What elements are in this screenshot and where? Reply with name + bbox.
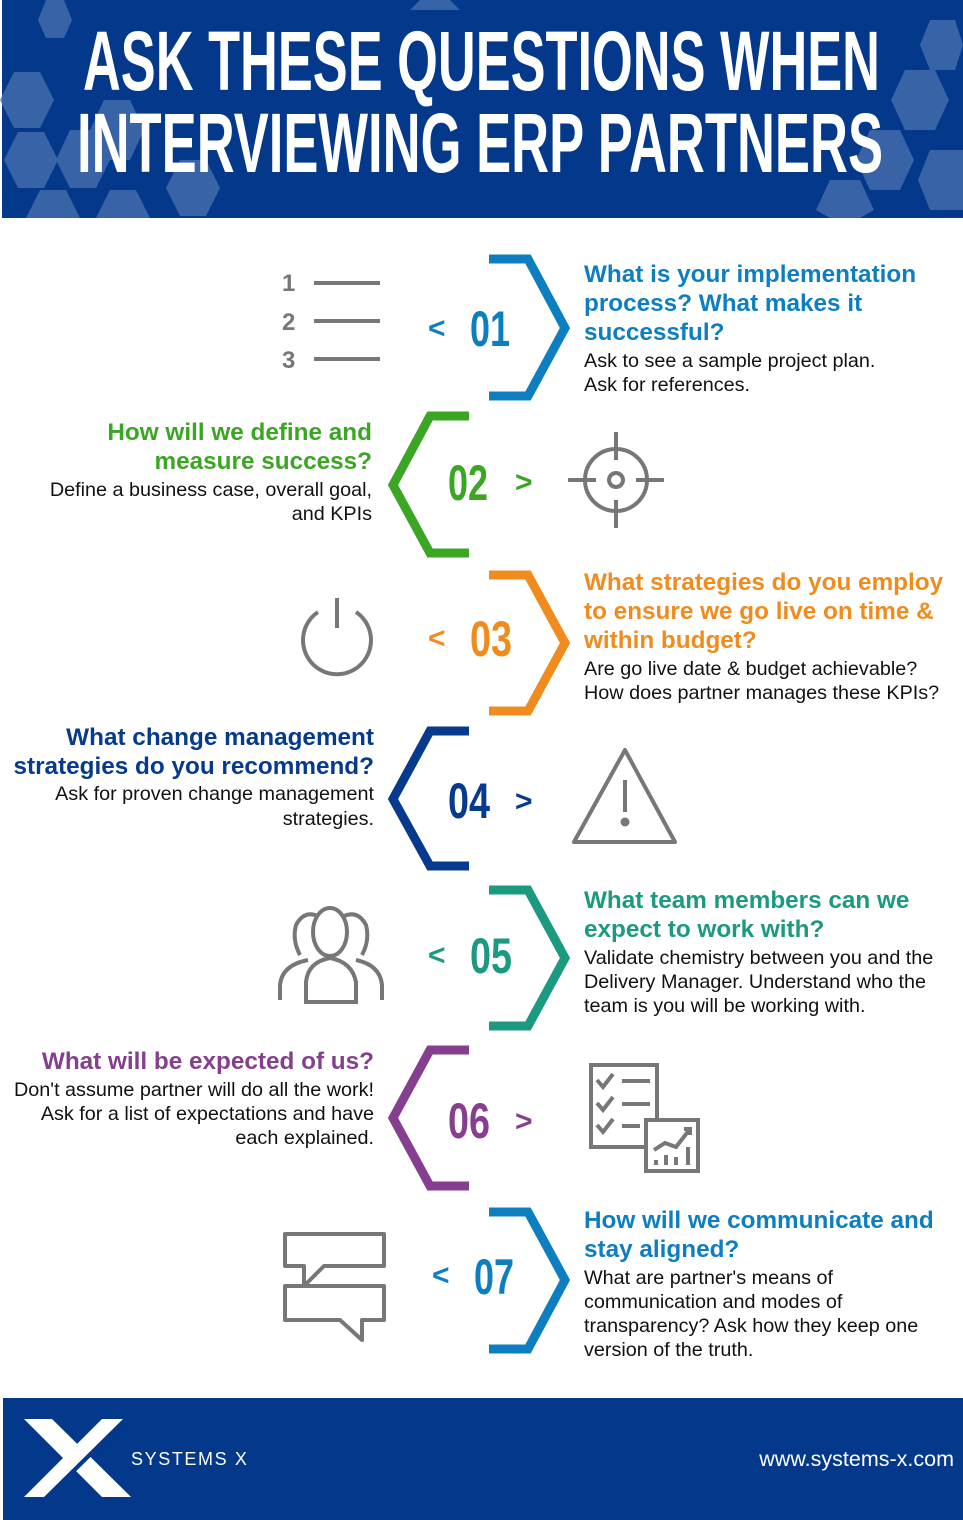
text 05: Validate chemistry between you and the bbox=[584, 947, 933, 969]
number 02 bbox=[448, 455, 533, 511]
number 05: < bbox=[428, 939, 446, 972]
icon: checklist with chart bbox=[591, 1065, 698, 1171]
chevron 02 bbox=[393, 416, 469, 553]
text 03: What strategies do you employ bbox=[584, 569, 944, 596]
number 04 bbox=[448, 773, 533, 829]
chevron 06 bbox=[393, 1050, 469, 1186]
section 01 bbox=[282, 259, 916, 396]
text 06 bbox=[14, 1048, 374, 1149]
section 05 bbox=[280, 887, 933, 1026]
number 01: 01 bbox=[470, 301, 510, 357]
text 03: to ensure we go live on time & bbox=[584, 598, 934, 625]
text 06: Ask for a list of expectations and have bbox=[41, 1103, 374, 1125]
title bbox=[77, 14, 883, 190]
icon: numbered list bbox=[282, 270, 380, 374]
number 01: < bbox=[428, 312, 446, 345]
text 04 bbox=[14, 724, 374, 830]
text 07: What are partner's means of bbox=[584, 1267, 833, 1289]
text 03: How does partner manages these KPIs? bbox=[584, 682, 939, 704]
chevron 07 bbox=[489, 1212, 565, 1349]
website url: www.systems-x.com bbox=[758, 1447, 954, 1471]
number 07 bbox=[432, 1249, 514, 1305]
text 07: version of the truth. bbox=[584, 1339, 753, 1361]
number 05 bbox=[428, 928, 512, 984]
text 07: How will we communicate and bbox=[584, 1207, 934, 1234]
number 05: 05 bbox=[470, 928, 512, 984]
footer bbox=[3, 1398, 963, 1520]
icon: target bbox=[568, 432, 664, 528]
icon: numbered list: 1 bbox=[282, 270, 295, 297]
text 04: What change management bbox=[66, 724, 374, 751]
header banner bbox=[0, 0, 963, 218]
text 05: Delivery Manager. Understand who the bbox=[584, 971, 926, 993]
text 01: process? What makes it bbox=[584, 290, 862, 317]
text 07: transparency? Ask how they keep one bbox=[584, 1315, 918, 1337]
number 03: < bbox=[428, 622, 446, 655]
chevron 01 bbox=[489, 259, 565, 396]
text 05: What team members can we bbox=[584, 887, 909, 914]
text 07: stay aligned? bbox=[584, 1236, 739, 1263]
text 06: What will be expected of us? bbox=[42, 1048, 374, 1075]
number 06: > bbox=[515, 1105, 533, 1138]
text 02: Define a business case, overall goal, bbox=[50, 479, 372, 501]
text 05: expect to work with? bbox=[584, 916, 824, 943]
logo: X mark bbox=[24, 1419, 131, 1497]
number 04: > bbox=[515, 785, 533, 818]
text 05 bbox=[584, 887, 933, 1017]
text 02 bbox=[50, 419, 372, 525]
icon: numbered list: 2 bbox=[282, 309, 295, 336]
text 02: measure success? bbox=[155, 448, 372, 475]
number 03: 03 bbox=[470, 611, 512, 667]
number 02: > bbox=[515, 466, 533, 499]
number 07: 07 bbox=[474, 1249, 514, 1305]
text 04: Ask for proven change management bbox=[55, 783, 374, 805]
text 02: and KPIs bbox=[292, 503, 372, 525]
text 03: Are go live date & budget achievable? bbox=[584, 658, 917, 680]
section 03 bbox=[303, 569, 944, 711]
icon: power bbox=[303, 598, 371, 674]
chevron 04 bbox=[393, 731, 469, 866]
text 07 bbox=[584, 1207, 934, 1361]
chevron 03 bbox=[489, 575, 565, 711]
icon: numbered list: 3 bbox=[282, 347, 295, 374]
text 01: successful? bbox=[584, 319, 724, 346]
number 06 bbox=[448, 1093, 533, 1149]
number 06: 06 bbox=[448, 1093, 490, 1149]
text 01: Ask for references. bbox=[584, 374, 750, 396]
section 04 bbox=[14, 724, 675, 866]
section 07 bbox=[285, 1207, 934, 1361]
text 01: What is your implementation bbox=[584, 261, 916, 288]
text 01: Ask to see a sample project plan. bbox=[584, 350, 875, 372]
section 02 bbox=[50, 416, 664, 553]
number 07: < bbox=[432, 1259, 450, 1292]
section 06 bbox=[14, 1048, 698, 1186]
text 07: communication and modes of bbox=[584, 1291, 843, 1313]
icon: warning bbox=[574, 750, 675, 842]
icon: chat bubbles bbox=[285, 1234, 384, 1340]
number 02: 02 bbox=[448, 455, 488, 511]
text 03: within budget? bbox=[583, 627, 757, 654]
text 02: How will we define and bbox=[107, 419, 372, 446]
chevron 05 bbox=[489, 890, 565, 1026]
text 01 bbox=[584, 261, 916, 396]
text 04: strategies do you recommend? bbox=[14, 753, 374, 780]
logo text: SYSTEMS X bbox=[131, 1449, 248, 1469]
icon: team bbox=[280, 908, 382, 1002]
text 04: strategies. bbox=[283, 808, 374, 830]
text 03 bbox=[583, 569, 944, 704]
text 05: team is you will be working with. bbox=[584, 995, 865, 1017]
number 03 bbox=[428, 611, 512, 667]
number 04: 04 bbox=[448, 773, 490, 829]
text 06: each explained. bbox=[235, 1127, 374, 1149]
number 01 bbox=[428, 301, 510, 357]
text 06: Don't assume partner will do all the work! bbox=[14, 1079, 374, 1101]
